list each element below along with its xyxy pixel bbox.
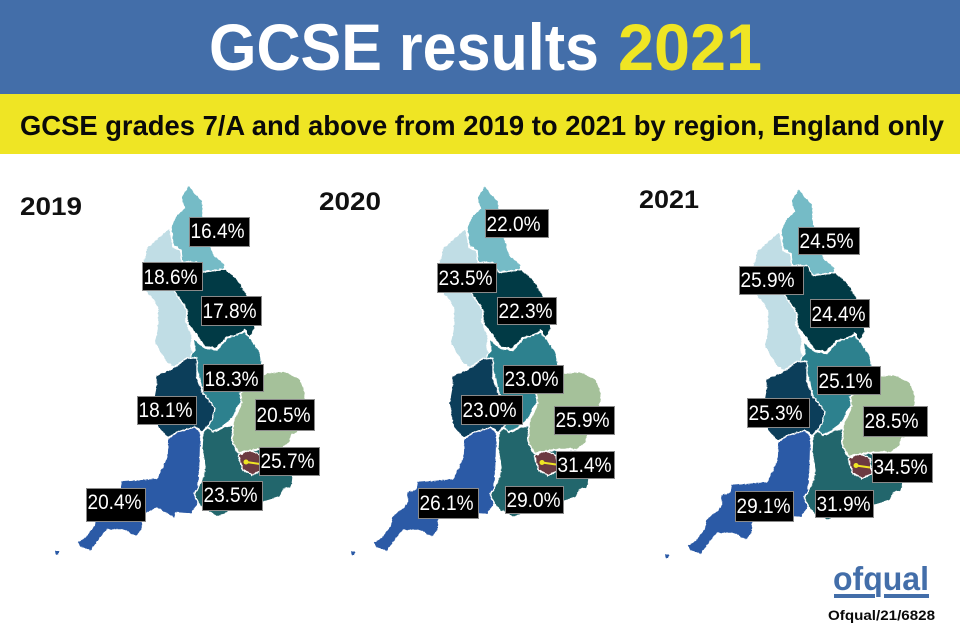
labels: 2020 regional values: 25.9% [556, 409, 610, 432]
labels: 2019 regional values: 18.1% [138, 399, 192, 422]
labels: 2020 regional values: 22.3% [498, 300, 552, 323]
header banner [0, 0, 960, 94]
labels: 2019 regional values: 18.3% [204, 368, 258, 391]
labels: 2021 regional values: 28.5% [864, 410, 918, 433]
labels: 2019 regional values: 16.4% [190, 220, 244, 243]
panel: 2019 map [55, 185, 306, 555]
panel: 2019 heading: 2019 [20, 193, 82, 221]
subtitle band [0, 94, 960, 154]
labels: 2020 regional values: 26.1% [420, 492, 474, 515]
labels: 2021 regional values: 24.4% [812, 303, 866, 326]
labels: 2019 regional values: 20.5% [256, 404, 310, 427]
labels: 2020 regional values: 23.5% [438, 267, 492, 290]
labels: 2021 regional values: 25.9% [740, 269, 794, 292]
labels: 2021 regional values: 25.3% [748, 402, 802, 425]
labels: 2019 regional values: 20.4% [88, 491, 142, 514]
labels: 2020 regional values: 29.0% [506, 489, 560, 512]
labels: 2019 regional values: 17.8% [202, 300, 256, 323]
labels: 2021 regional values: 25.1% [818, 370, 872, 393]
labels: 2020 regional values: 23.0% [462, 399, 516, 422]
panel: 2020 heading: 2020 [319, 188, 381, 216]
labels: 2021 regional values: 29.1% [736, 495, 790, 518]
labels: 2020 regional values: 22.0% [486, 213, 540, 236]
title: GCSE results [209, 10, 599, 84]
labels: 2019 regional values: 23.5% [204, 484, 258, 507]
labels: 2020 regional values [418, 210, 614, 518]
reference code: Ofqual/21/6828 [828, 607, 935, 623]
labels: 2021 regional values: 24.5% [800, 230, 854, 253]
labels: 2021 regional values: 31.9% [816, 493, 870, 516]
panel: 2020 map [351, 186, 602, 556]
subtitle: GCSE grades 7/A and above from 2019 to 2021 by region, England only [20, 110, 945, 141]
labels: 2021 regional values: 34.5% [874, 456, 928, 479]
panel: 2021 heading: 2021 [639, 186, 699, 214]
labels: 2019 regional values: 25.7% [260, 450, 314, 473]
labels: 2021 regional values [736, 228, 932, 522]
panel: 2021 map [665, 188, 916, 558]
labels: 2020 regional values: 23.0% [504, 368, 558, 391]
labels: 2019 regional values [86, 218, 320, 522]
labels: 2019 regional values: 18.6% [144, 266, 198, 289]
logo: ofqual: ofqual [833, 560, 929, 597]
labels: 2020 regional values: 31.4% [558, 454, 612, 477]
title: 2021 [618, 10, 762, 84]
